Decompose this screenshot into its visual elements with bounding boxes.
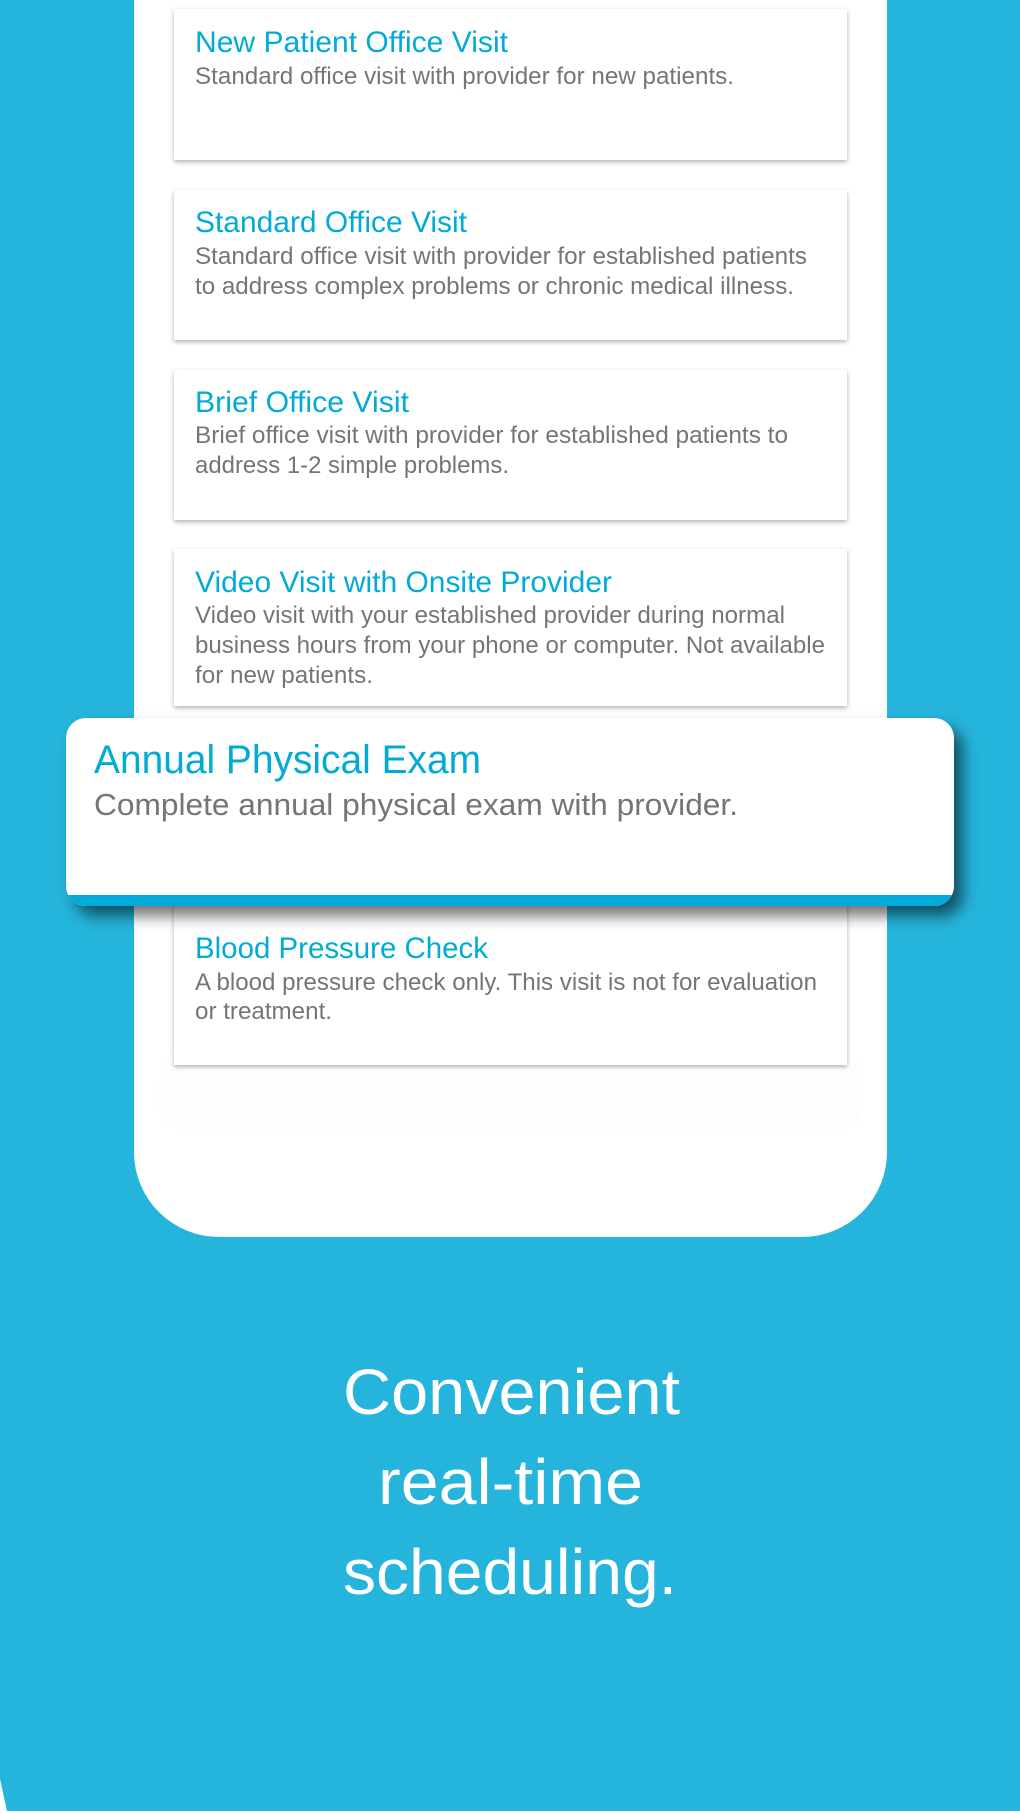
card: Video Visit with Onsite Provider [174,549,847,706]
headline: scheduling. [343,1536,677,1608]
card: New Patient Office Visit: New Patient Office Visit [195,26,509,59]
card: Blood Pressure Check: or treatment. [195,998,332,1025]
card: Brief Office Visit: Brief office visit with provider for established patients to [195,422,788,449]
card: Blood Pressure Check [174,880,847,1065]
card: Blood Pressure Check: A blood pressure check only. This visit is not for evaluation [195,969,817,996]
card: Standard Office Visit: Standard Office Visit [195,206,468,239]
card: Video Visit with Onsite Provider: for new patients. [195,662,373,689]
card: Video Visit with Onsite Provider: business hours from your phone or computer. Not available [195,632,825,659]
card: New Patient Office Visit: Standard office visit with provider for new patients. [195,63,734,90]
card: Standard Office Visit: to address complex problems or chronic medical illness. [195,273,794,300]
panel: phone screen [134,0,887,1237]
card: Standard Office Visit: Standard office visit with provider for established patients [195,243,807,270]
card: Brief Office Visit: address 1-2 simple problems. [195,452,509,479]
panel: faint empty card [159,1050,862,1129]
card: Blood Pressure Check: Blood Pressure Check [195,932,489,965]
card: Standard Office Visit [174,190,847,340]
headline [343,1356,680,1608]
headline: Convenient [343,1356,680,1428]
highlighted card: Annual Physical Exam [66,718,954,906]
headline: real-time [378,1446,643,1518]
card: Brief Office Visit: Brief Office Visit [195,386,410,419]
highlighted card: Annual Physical Exam: Complete annual physical exam with provider. [94,787,738,822]
card: Video Visit with Onsite Provider: Video visit with your established provider during normal [195,602,785,629]
card: New Patient Office Visit [174,9,847,160]
highlighted card: Annual Physical Exam: Annual Physical Exam [94,738,481,782]
card: Brief Office Visit [174,370,847,520]
card: Video Visit with Onsite Provider: Video Visit with Onsite Provider [195,566,612,599]
